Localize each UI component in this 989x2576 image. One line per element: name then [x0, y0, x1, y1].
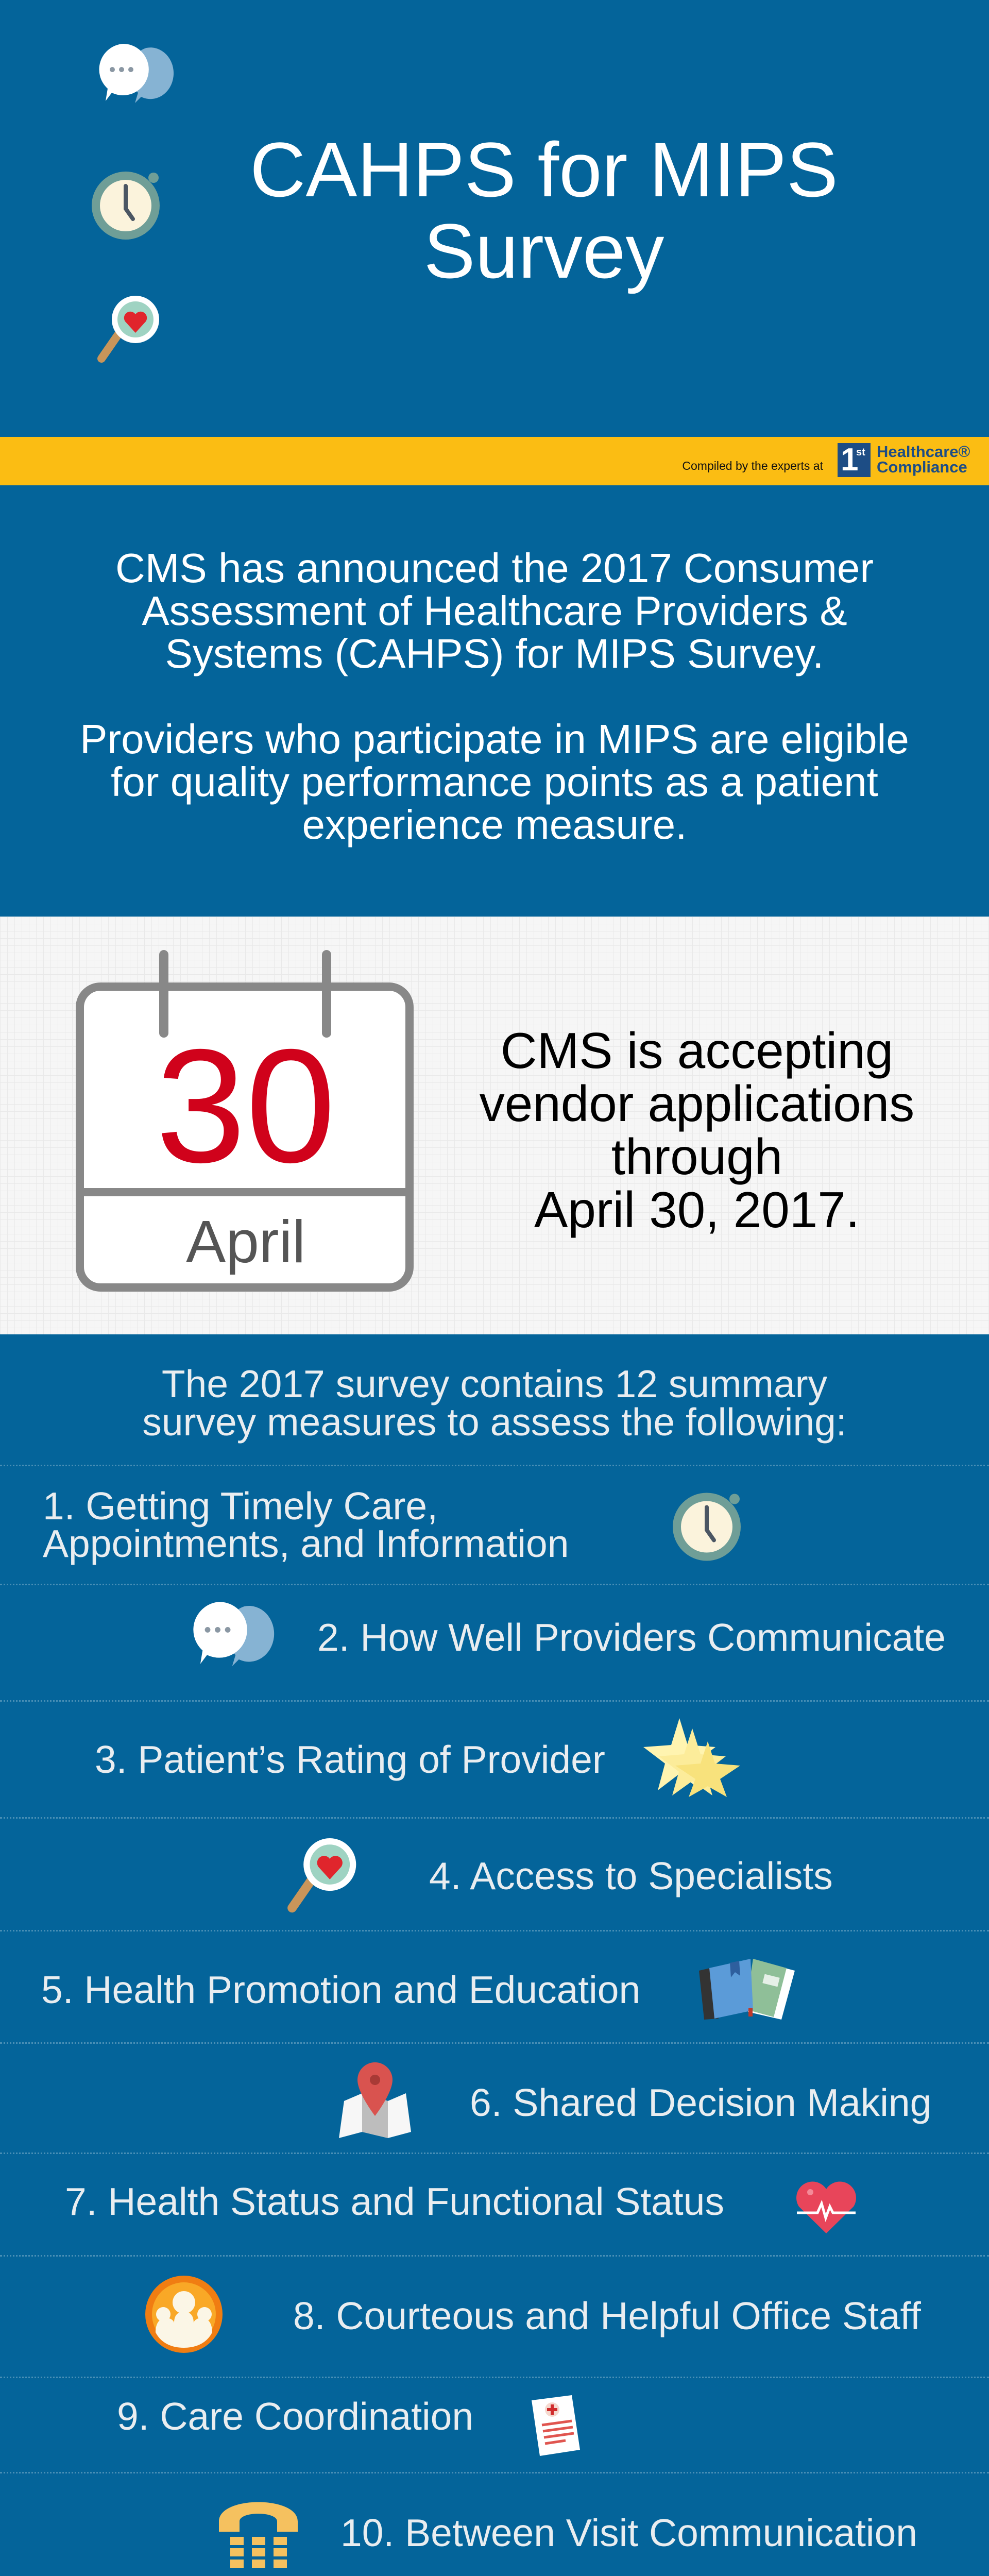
measure 1: 1. Getting Timely Care, — [43, 1484, 438, 1528]
credit text: Compiled by the experts at — [682, 459, 823, 472]
deadline text — [480, 1022, 914, 1238]
icon: telephone — [219, 2502, 298, 2568]
deadline text: through — [611, 1128, 782, 1185]
title — [250, 126, 838, 294]
measure 4: 4. Access to Specialists — [429, 1854, 833, 1897]
measure 1 — [43, 1484, 569, 1565]
yellow credit strip — [0, 437, 989, 485]
intro text: Assessment of Healthcare Providers & — [142, 588, 847, 634]
measure 2: 2. How Well Providers Communicate — [317, 1616, 946, 1659]
icon: stopwatch — [92, 172, 160, 240]
intro text: for quality performance points as a patient — [111, 759, 878, 805]
icon: heart pulse — [796, 2181, 856, 2233]
intro panel — [0, 485, 989, 917]
title: Survey — [424, 208, 664, 294]
deadline panel — [0, 917, 989, 1334]
measure 5: 5. Health Promotion and Education — [41, 1968, 640, 2011]
measures intro: The 2017 survey contains 12 summary — [162, 1362, 827, 1405]
measure 1: Appointments, and Information — [43, 1522, 569, 1565]
intro text: Providers who participate in MIPS are eligible — [80, 716, 909, 762]
logo small: Healthcare® — [877, 443, 970, 461]
measures intro: survey measures to assess the following: — [142, 1400, 847, 1444]
logo small: st — [856, 447, 865, 458]
icon: chat bubbles — [99, 44, 174, 103]
icon: map pin — [339, 2062, 411, 2138]
measure 7: 7. Health Status and Functional Status — [65, 2180, 724, 2223]
intro text: CMS has announced the 2017 Consumer — [115, 545, 874, 591]
icon: chat 2 — [193, 1602, 274, 1666]
measure 8: 8. Courteous and Helpful Office Staff — [293, 2294, 921, 2337]
measure 6: 6. Shared Decision Making — [470, 2081, 931, 2124]
icon: medical document — [532, 2395, 580, 2456]
header panel — [0, 0, 989, 437]
icon: books — [699, 1959, 795, 2020]
deadline text: vendor applications — [480, 1075, 914, 1132]
icon: calendar April 30 — [76, 950, 414, 1292]
intro text: Systems (CAHPS) for MIPS Survey. — [165, 631, 824, 676]
icon: stars — [643, 1718, 740, 1797]
icon: stopwatch 1 — [673, 1493, 741, 1561]
icon: staff circle — [145, 2276, 223, 2353]
date number: 30 — [156, 1015, 336, 1196]
measure 10: 10. Between Visit Communication — [340, 2511, 917, 2554]
logo small: Compliance — [877, 458, 967, 476]
measure 9: 9. Care Coordination — [117, 2395, 473, 2438]
intro text: experience measure. — [302, 802, 687, 848]
logo small: 1 — [841, 442, 858, 478]
month: April — [186, 1208, 305, 1275]
icon: magnifier 4 — [287, 1838, 356, 1912]
deadline text: CMS is accepting — [501, 1022, 893, 1079]
title: CAHPS for MIPS — [250, 126, 838, 213]
icon: magnifier heart — [97, 296, 159, 363]
intro text — [80, 545, 909, 848]
measures intro — [142, 1362, 847, 1444]
measure 3: 3. Patient’s Rating of Provider — [95, 1738, 605, 1781]
deadline text: April 30, 2017. — [534, 1181, 860, 1238]
logo small — [838, 442, 970, 478]
measures panel — [0, 1334, 989, 2576]
